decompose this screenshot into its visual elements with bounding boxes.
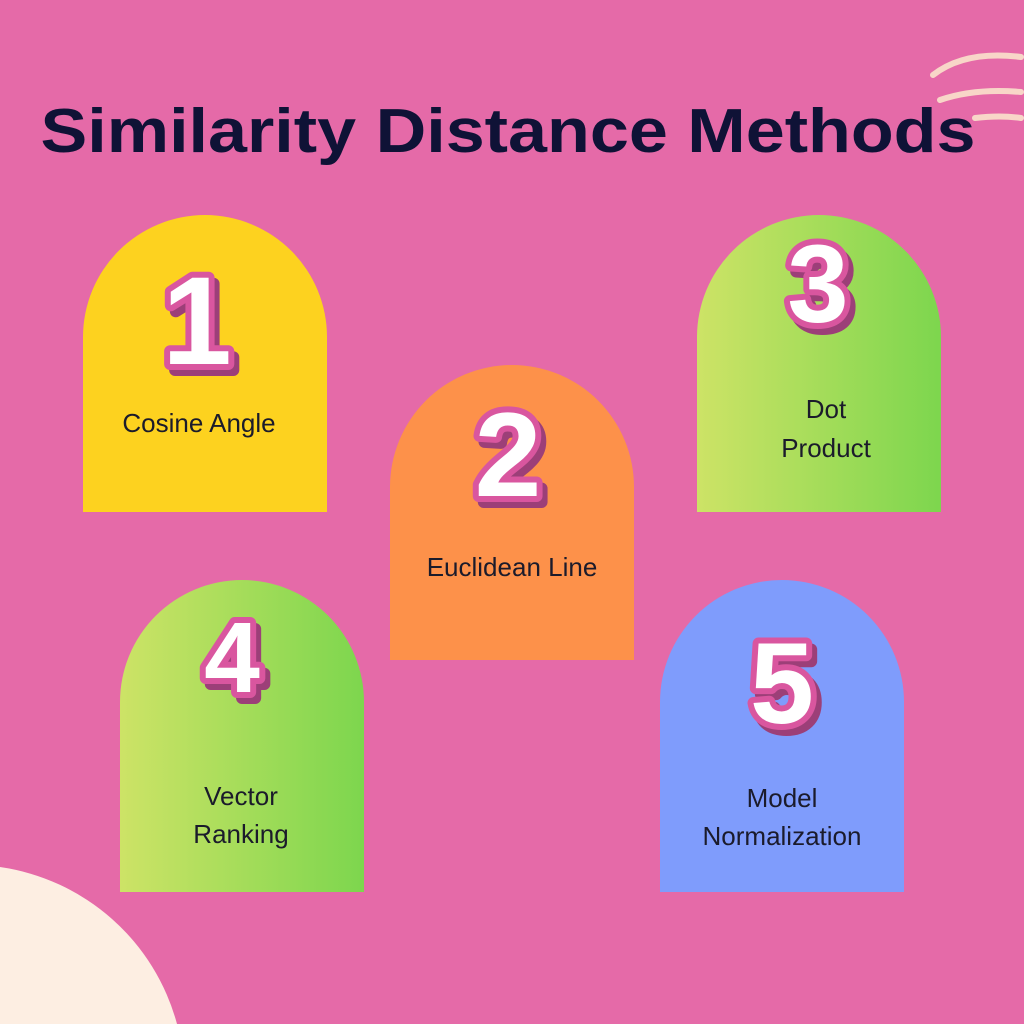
card 5: Model Normalization: Model (747, 783, 817, 813)
card 4: Vector Ranking: 4 (204, 602, 260, 714)
card 3: Dot Product: Product (781, 433, 872, 463)
title: Similarity Distance Methods (40, 97, 976, 166)
card 5: Model Normalization (660, 580, 904, 892)
decoration: bottom-left circle (0, 867, 177, 1024)
card 1: Cosine Angle: 1 (167, 258, 237, 397)
card 4: Vector Ranking: Vector (204, 781, 278, 811)
card 2: Euclidean Line: 2 (480, 394, 546, 528)
card 4: Vector Ranking: 4 (209, 608, 265, 720)
card 4: Vector Ranking: Ranking (193, 819, 289, 849)
card 4: Vector Ranking (120, 580, 364, 892)
card 2: Euclidean Line: Euclidean Line (427, 552, 597, 582)
card 5: Model Normalization: 5 (750, 620, 814, 748)
card 3: Dot Product: 3 (787, 223, 849, 346)
card 2: Euclidean Line (390, 365, 634, 660)
card 1: Cosine Angle (83, 215, 327, 512)
card 3: Dot Product: 3 (792, 229, 854, 352)
card 2: Euclidean Line: 2 (475, 388, 541, 522)
card 5: Model Normalization: Normalization (703, 821, 861, 851)
card 3: Dot Product: Dot (806, 394, 847, 424)
card 1: Cosine Angle: Cosine Angle (122, 408, 276, 438)
decoration: top-right arcs (933, 55, 1021, 118)
card 5: Model Normalization: 5 (755, 626, 819, 754)
card 3: Dot Product (697, 215, 941, 512)
card 1: Cosine Angle: 1 (162, 252, 232, 391)
